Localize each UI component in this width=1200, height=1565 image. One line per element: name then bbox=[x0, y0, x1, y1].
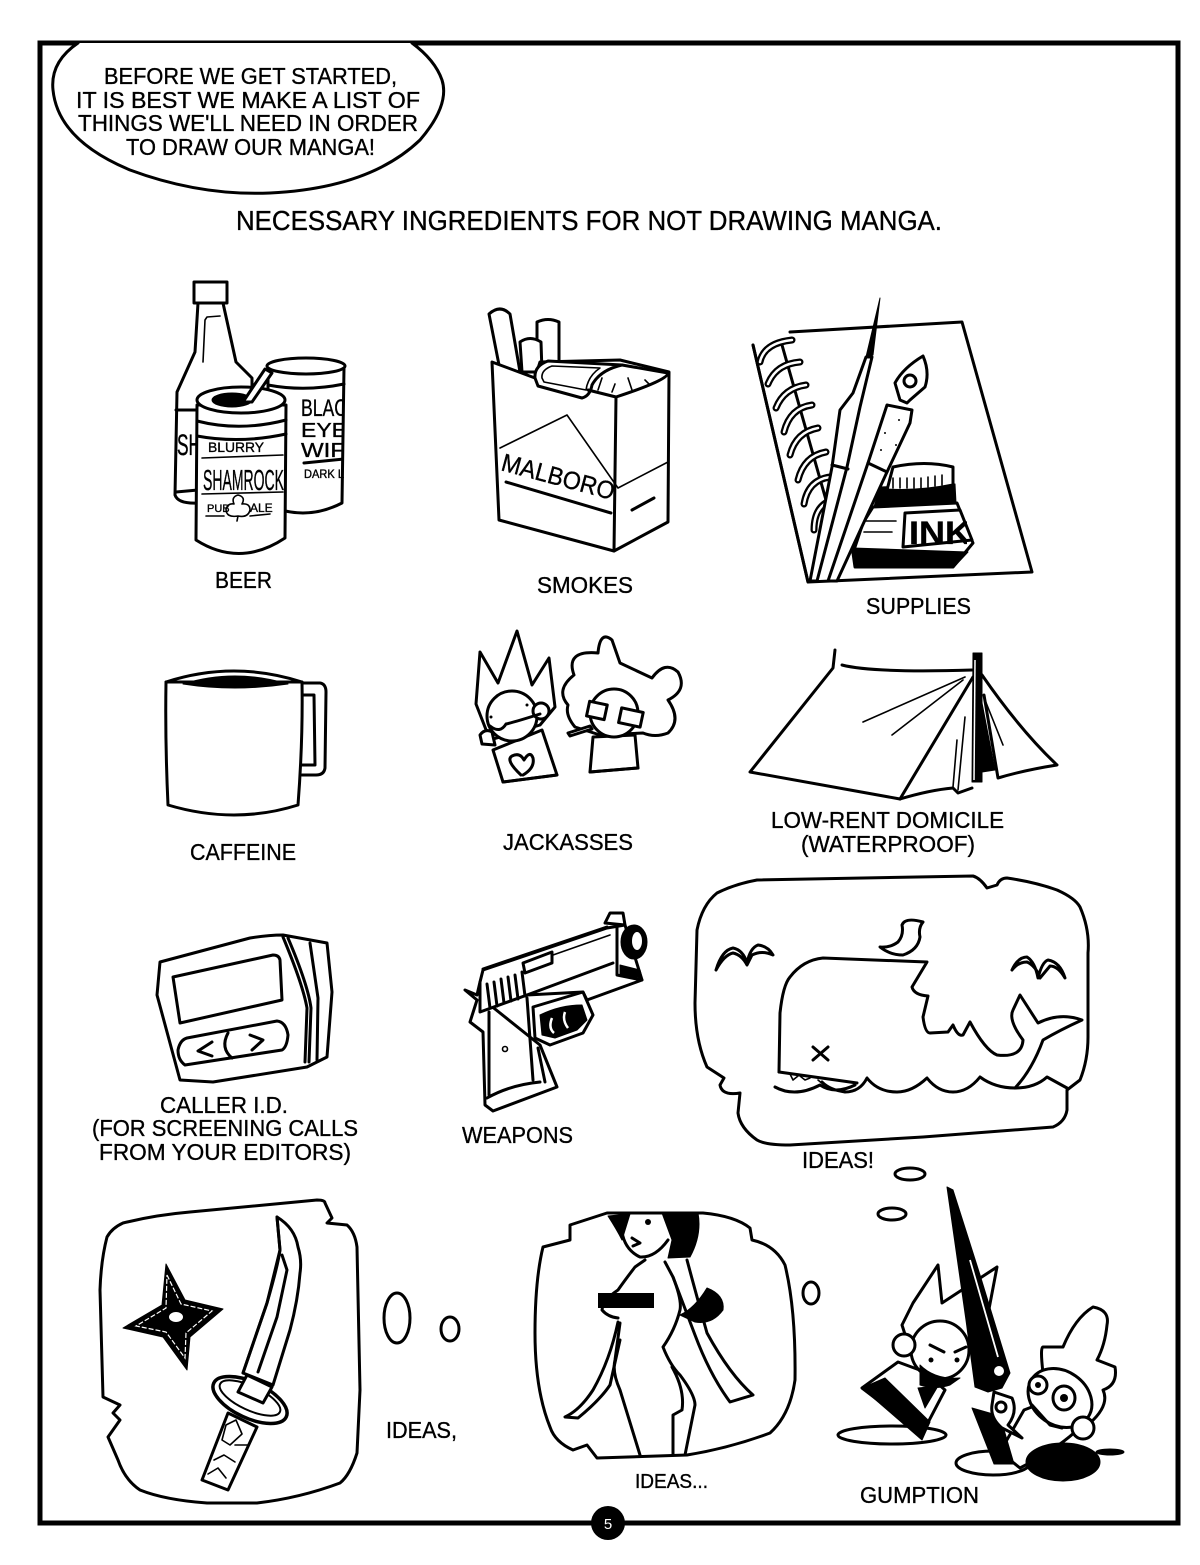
waves bbox=[822, 1077, 1067, 1092]
icon: tent bbox=[750, 650, 1057, 799]
icon: art supplies bbox=[753, 298, 1032, 582]
shuriken bbox=[123, 1264, 223, 1370]
caption: caller i.d.: FROM YOUR EDITORS) bbox=[99, 1139, 351, 1165]
grip bbox=[465, 982, 557, 1111]
icon: cigarette pack: MALBORO bbox=[498, 449, 618, 506]
caption: caller i.d.: (FOR SCREENING CALLS bbox=[92, 1115, 358, 1141]
beer can: ALE bbox=[250, 501, 273, 515]
bird right bbox=[1012, 957, 1065, 978]
katana blade bbox=[243, 1217, 301, 1385]
bubble outline bbox=[535, 1213, 795, 1458]
caption: weapons: WEAPONS bbox=[462, 1122, 573, 1148]
tent opening bbox=[982, 703, 995, 772]
perched bird bbox=[880, 920, 923, 955]
icon: gumption characters and giant pen bbox=[838, 1187, 1124, 1481]
caption: supplies: SUPPLIES bbox=[866, 593, 971, 619]
caption: caller i.d.: CALLER I.D. bbox=[160, 1092, 288, 1118]
whale bbox=[779, 958, 1082, 1088]
face bbox=[622, 1219, 668, 1257]
caption: low-rent domicile: (WATERPROOF) bbox=[801, 831, 975, 857]
character: spiky hair bbox=[476, 631, 557, 782]
bubble outline bbox=[695, 876, 1088, 1145]
idea bubble: whale bbox=[695, 876, 1088, 1145]
front sight bbox=[605, 913, 625, 925]
beer can bbox=[196, 369, 286, 554]
caption: ideas!: IDEAS! bbox=[802, 1147, 874, 1173]
giant dip pen bbox=[947, 1187, 1022, 1438]
brush bbox=[810, 298, 880, 581]
page number bbox=[591, 1506, 625, 1540]
muzzle bbox=[621, 925, 647, 959]
icon: beer: SHAMROCK bbox=[203, 465, 284, 497]
caption: ideas...: IDEAS... bbox=[635, 1471, 708, 1493]
back can: BLAC bbox=[301, 395, 347, 422]
trigger guard bbox=[533, 992, 593, 1045]
katana bbox=[202, 1217, 301, 1490]
figure outline bbox=[565, 1260, 753, 1455]
idea bubble: ninja weapons bbox=[100, 1200, 360, 1503]
caption: low-rent domicile bbox=[771, 807, 1004, 857]
caption: caffeine: CAFFEINE bbox=[190, 839, 296, 865]
caption: smokes: SMOKES bbox=[537, 572, 633, 598]
ponytail bbox=[680, 1288, 723, 1322]
character: curly hair bbox=[563, 637, 681, 772]
speech bubble bbox=[53, 43, 444, 193]
whale jaw bbox=[775, 1072, 857, 1092]
beer can: BLURRY bbox=[208, 439, 265, 455]
bird left bbox=[716, 945, 773, 970]
caption: beer: BEER bbox=[215, 567, 272, 593]
katana handle bbox=[202, 1413, 257, 1490]
hair bbox=[608, 1213, 699, 1258]
katana guard bbox=[206, 1367, 294, 1433]
icon: pager bbox=[157, 935, 332, 1082]
thought ovals: top right bbox=[878, 1168, 925, 1220]
icon: cigarette pack bbox=[489, 309, 669, 551]
beer can: PUB bbox=[207, 503, 230, 515]
slide bbox=[480, 925, 642, 1012]
back can bbox=[267, 358, 347, 513]
caption: gumption: GUMPTION bbox=[860, 1482, 979, 1508]
whale eye x bbox=[813, 1047, 828, 1060]
beer bottle bbox=[175, 282, 252, 503]
idea bubble: censored figure bbox=[535, 1213, 795, 1458]
caption: caller i.d. bbox=[92, 1092, 358, 1165]
notebook bbox=[753, 322, 1032, 582]
speech bubble: TO DRAW OUR MANGA! bbox=[126, 134, 375, 160]
beer bottle: SH bbox=[177, 429, 201, 462]
censor bar bbox=[598, 1293, 654, 1308]
icon: beer bbox=[175, 282, 347, 554]
back can: WIF bbox=[301, 440, 345, 462]
ink jar bbox=[853, 464, 973, 568]
caption: ideas,: IDEAS, bbox=[386, 1417, 457, 1443]
bubble outline bbox=[100, 1200, 360, 1503]
cigarettes bbox=[489, 309, 559, 372]
tent pole bbox=[972, 653, 982, 782]
icon: two jackasses bbox=[476, 631, 681, 782]
page number: 5 bbox=[604, 1516, 612, 1533]
speech bubble: IT IS BEST WE MAKE A LIST OF bbox=[76, 87, 420, 113]
icon: pistol bbox=[465, 913, 647, 1111]
icon: coffee mug bbox=[166, 671, 326, 815]
caption: jackasses: JACKASSES bbox=[503, 829, 633, 855]
caption: low-rent domicile: LOW-RENT DOMICILE bbox=[771, 807, 1004, 833]
ink puddle bbox=[1026, 1443, 1100, 1481]
back can: DARK L bbox=[304, 467, 344, 481]
thought oval: middle bbox=[803, 1282, 819, 1304]
dip pen bbox=[828, 356, 927, 581]
surprised character bbox=[956, 1307, 1124, 1481]
speech bubble: BEFORE WE GET STARTED, bbox=[104, 63, 397, 89]
spiral rings bbox=[760, 340, 832, 530]
ink jar: INK bbox=[909, 515, 971, 551]
thought ovals: left bbox=[384, 1293, 459, 1343]
spiky-haired character bbox=[838, 1265, 997, 1444]
back can: EYE bbox=[301, 420, 347, 442]
title: NECESSARY INGREDIENTS FOR NOT DRAWING MANGA. bbox=[236, 205, 942, 236]
speech bubble: THINGS WE'LL NEED IN ORDER bbox=[78, 110, 418, 136]
